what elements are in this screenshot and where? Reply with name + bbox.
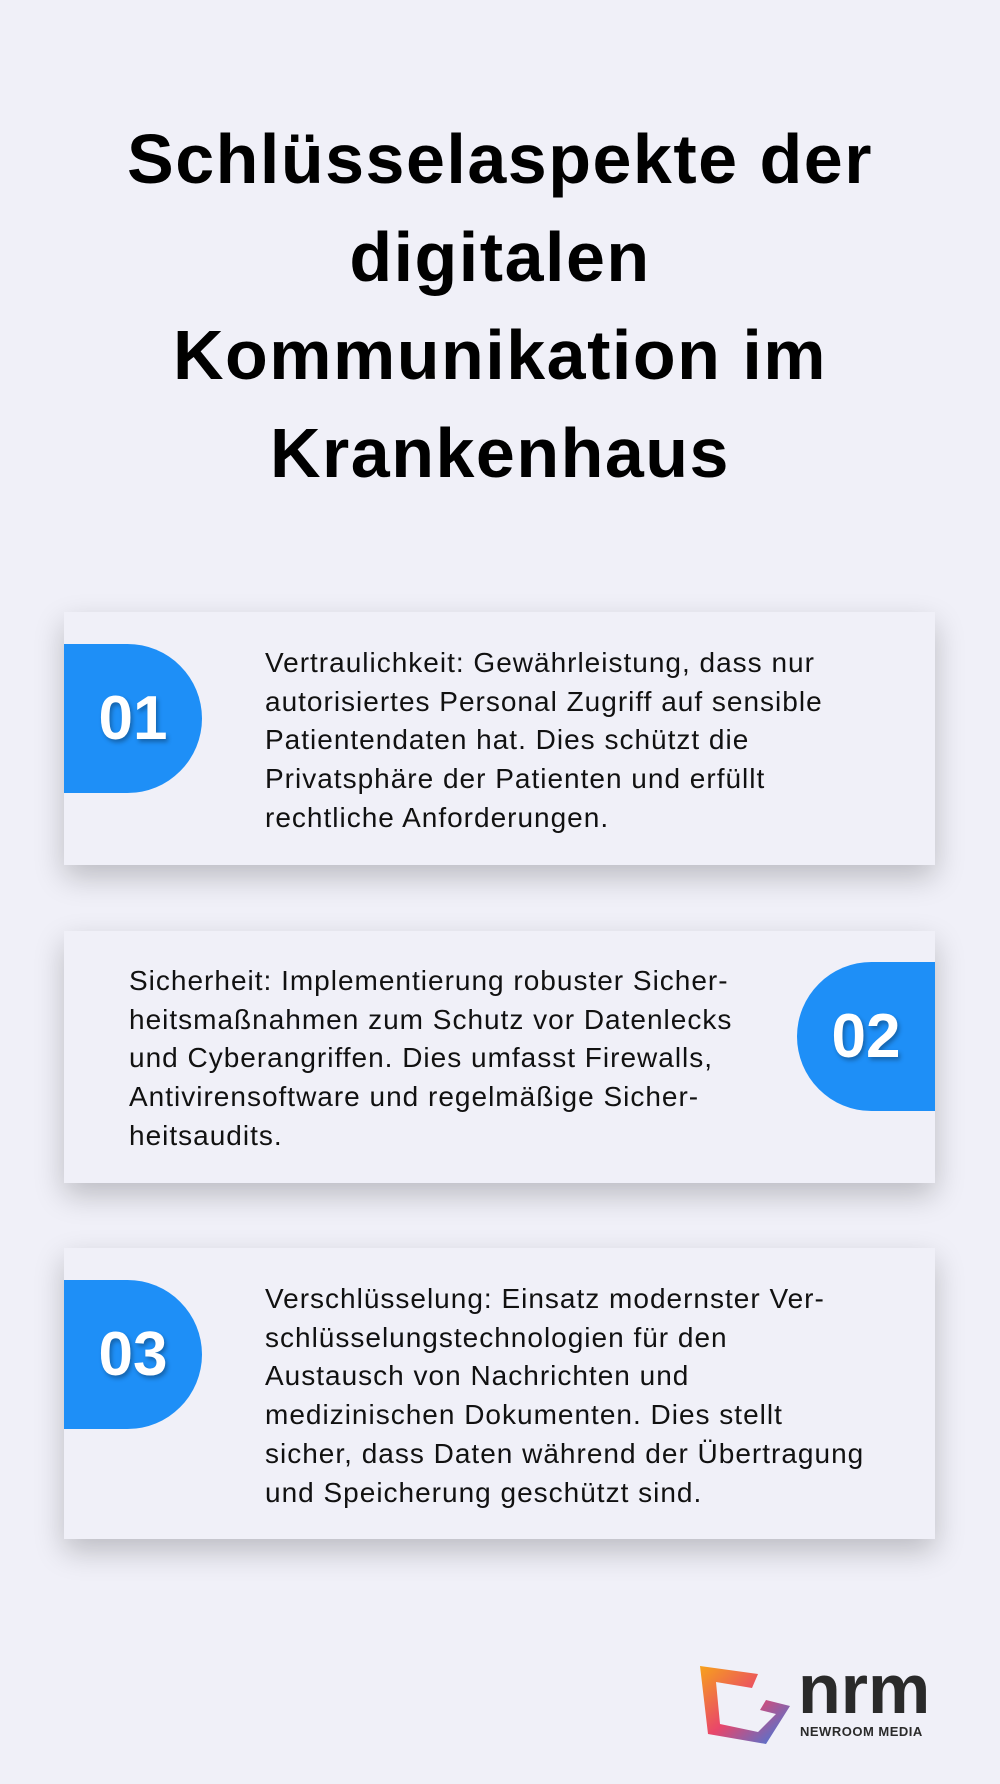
- text: Sicherheit: heitsaudits.: [129, 1120, 283, 1151]
- title: Krankenhaus: [270, 414, 730, 492]
- text: Vertraulichkeit: Privatsphäre der Patienten und erfüllt: [265, 763, 765, 794]
- badge 02: 02: [832, 1002, 900, 1071]
- text: Vertraulichkeit: [265, 647, 823, 833]
- panel: card 02: [64, 931, 935, 1183]
- panel: card 03: [64, 1248, 935, 1539]
- logo: [700, 1650, 930, 1744]
- text: Vertraulichkeit: Vertraulichkeit: Gewährleistung, dass nur: [265, 647, 815, 678]
- logo text: nrm: [798, 1650, 930, 1728]
- text: Sicherheit: und Cyberangriffen. Dies umfasst Firewalls,: [129, 1042, 713, 1073]
- text: Verschlüsselung: Verschlüsselung: Einsatz modernster Ver-: [265, 1283, 825, 1314]
- text: Verschlüsselung: sicher, dass Daten während der Übertragung: [265, 1438, 864, 1469]
- icon: logo mark: [700, 1666, 790, 1744]
- title: digitalen: [349, 218, 651, 296]
- badge 03: 03: [99, 1320, 167, 1389]
- text: Verschlüsselung: [265, 1283, 864, 1508]
- text: Sicherheit: [129, 965, 732, 1151]
- title: Schlüsselaspekte der: [127, 120, 873, 198]
- badge 01: [64, 644, 202, 793]
- panel: card 01: [64, 612, 935, 865]
- logo: NEWROOM MEDIA: [800, 1724, 923, 1739]
- text: Sicherheit: heitsmaßnahmen zum Schutz vor Datenlecks: [129, 1004, 732, 1035]
- title: Kommunikation im: [173, 316, 827, 394]
- text: Sicherheit: Antivirensoftware und regelmäßige Sicher-: [129, 1081, 699, 1112]
- text: Vertraulichkeit: autorisiertes Personal Zugriff auf sensible: [265, 686, 823, 717]
- text: Sicherheit: Sicherheit: Implementierung robuster Sicher-: [129, 965, 729, 996]
- badge 02: [797, 962, 935, 1111]
- badge 03: [64, 1280, 202, 1429]
- text: Verschlüsselung: und Speicherung geschützt sind.: [265, 1477, 702, 1508]
- text: Vertraulichkeit: rechtliche Anforderungen.: [265, 802, 609, 833]
- text: Verschlüsselung: schlüsselungstechnologien für den: [265, 1322, 728, 1353]
- title: [127, 120, 873, 492]
- text: Verschlüsselung: Austausch von Nachrichten und: [265, 1360, 689, 1391]
- text: Vertraulichkeit: Patientendaten hat. Dies schützt die: [265, 724, 749, 755]
- badge 01: 01: [99, 684, 167, 753]
- text: Verschlüsselung: medizinischen Dokumenten. Dies stellt: [265, 1399, 783, 1430]
